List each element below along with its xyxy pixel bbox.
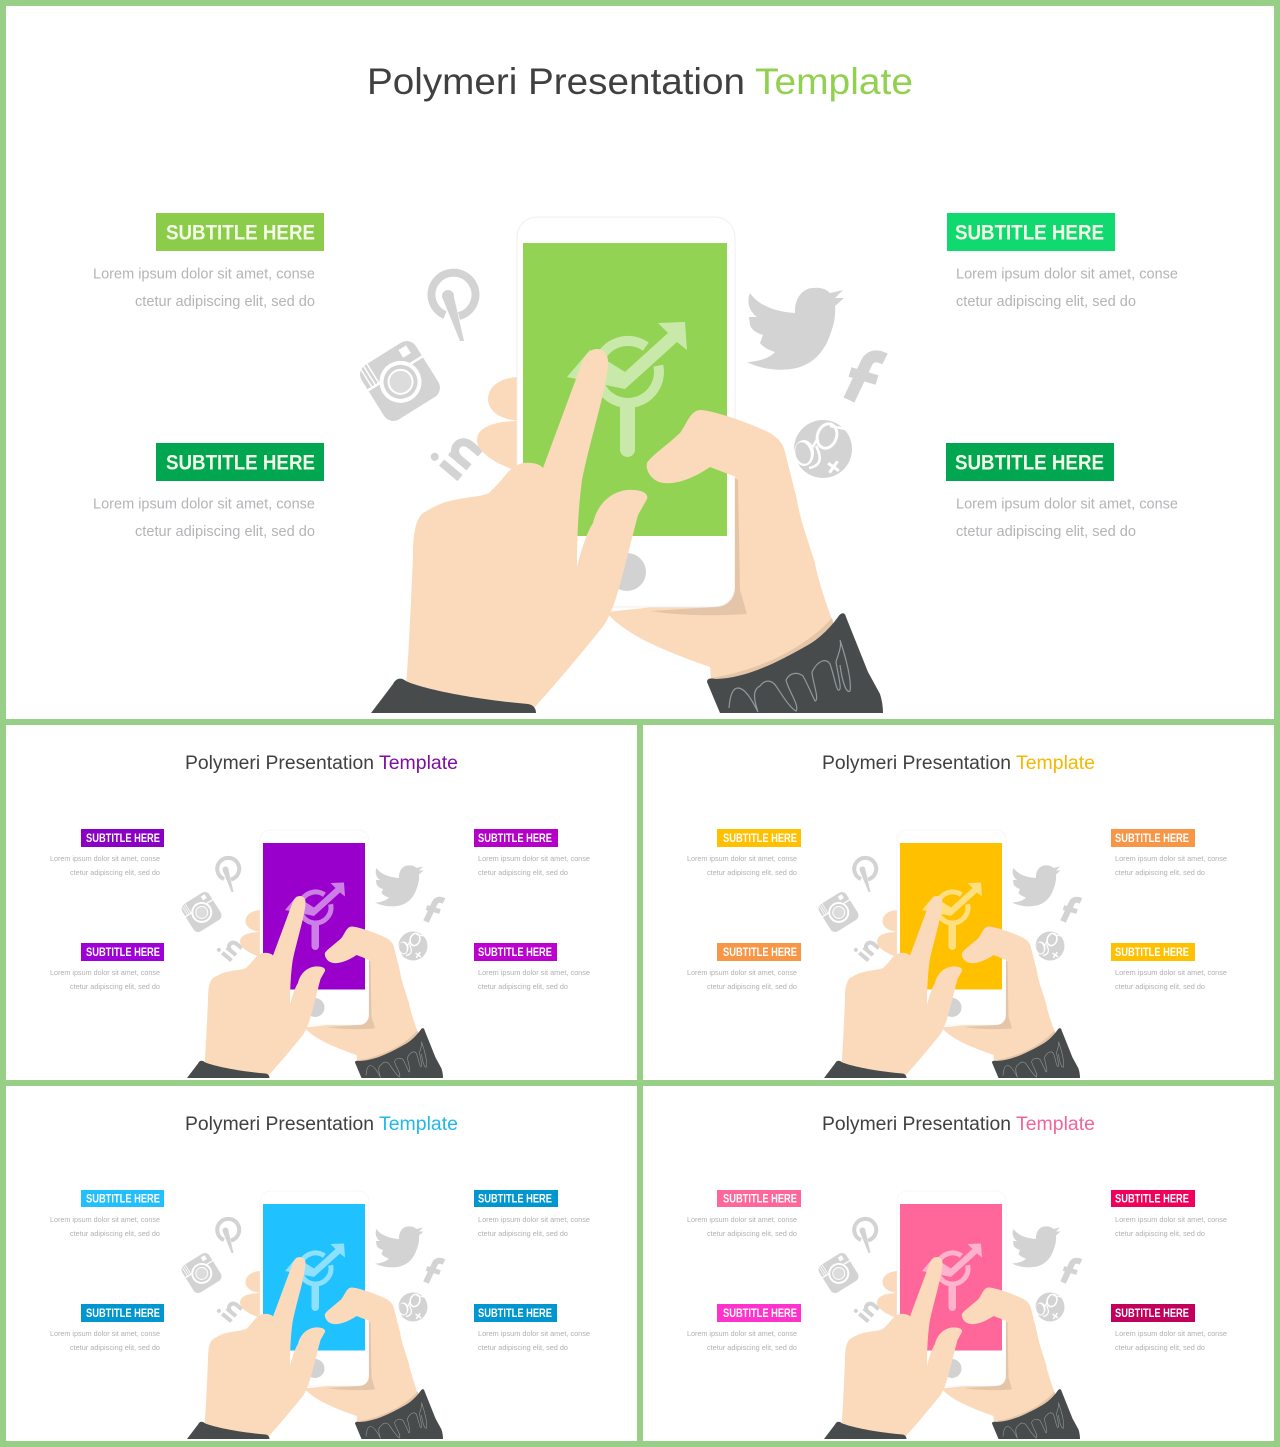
subtitle block: bottom left: SUBTITLE HERE [86, 947, 160, 959]
title: Polymeri Presentation [185, 1114, 374, 1135]
icon: facebook [849, 356, 885, 400]
icon: pinterest [431, 273, 475, 341]
subtitle block: bottom left: ctetur adipiscing elit, sed do [70, 982, 160, 991]
title: Polymeri Presentation [367, 61, 745, 102]
icon: magnifier and check arrow [567, 322, 687, 457]
right sleeve cuff [707, 613, 883, 713]
subtitle block: bottom right [1111, 943, 1227, 991]
illustration: pink phone [816, 1191, 1081, 1439]
subtitle block: bottom left [50, 1304, 164, 1352]
subtitle block: bottom right: ctetur adipiscing elit, sed do [956, 523, 1136, 540]
subtitle block: top right: ctetur adipiscing elit, sed do [1115, 1229, 1205, 1238]
hand: fingers behind phone [477, 377, 520, 472]
subtitle block: top left: ctetur adipiscing elit, sed do [70, 1229, 160, 1238]
title: Polymeri Presentation [185, 753, 374, 774]
icon: instagram [356, 337, 444, 425]
subtitle block: top left: ctetur adipiscing elit, sed do [707, 868, 797, 877]
subtitle block: bottom left: ctetur adipiscing elit, sed do [707, 1343, 797, 1352]
title [367, 61, 913, 102]
subtitle block: top right [474, 829, 590, 877]
subtitle block: bottom right: SUBTITLE HERE [478, 947, 552, 959]
title [185, 753, 458, 774]
subtitle block: top right [1111, 1190, 1227, 1238]
title [822, 753, 1095, 774]
subtitle block: top left: SUBTITLE HERE [166, 222, 315, 244]
subtitle block: bottom right: SUBTITLE HERE [1115, 1308, 1189, 1320]
subtitle block: bottom right: Lorem ipsum dolor sit amet, conse [956, 496, 1178, 512]
phone screen [523, 243, 727, 536]
subtitle block: bottom right: Lorem ipsum dolor sit amet, conse [1115, 968, 1227, 977]
illustration: yellow phone [816, 830, 1081, 1078]
subtitle block: bottom right [1111, 1304, 1227, 1352]
left sleeve cuff [371, 679, 536, 713]
subtitle block: top left: SUBTITLE HERE [723, 1194, 797, 1206]
subtitle block: bottom left [687, 1304, 801, 1352]
title: Template [1016, 753, 1095, 774]
subtitle block: bottom left: ctetur adipiscing elit, sed do [707, 982, 797, 991]
subtitle block: top right: Lorem ipsum dolor sit amet, conse [956, 266, 1178, 282]
left hand with pointing index finger [406, 349, 647, 708]
panel: main green slide [6, 6, 1274, 719]
subtitle block: bottom right: ctetur adipiscing elit, sed do [478, 982, 568, 991]
title: Polymeri Presentation [822, 1114, 1011, 1135]
subtitle block: bottom right: Lorem ipsum dolor sit amet, conse [478, 1329, 590, 1338]
phone body [517, 217, 735, 607]
icon: google plus [793, 419, 852, 478]
subtitle block: top left: SUBTITLE HERE [723, 833, 797, 845]
subtitle block: top left: Lorem ipsum dolor sit amet, conse [93, 266, 315, 282]
subtitle block: bottom left: Lorem ipsum dolor sit amet, conse [50, 1329, 160, 1338]
subtitle block: bottom left: Lorem ipsum dolor sit amet, conse [50, 968, 160, 977]
subtitle block: top right: SUBTITLE HERE [955, 222, 1104, 244]
subtitle block: top right [947, 213, 1178, 310]
subtitle block: bottom left: ctetur adipiscing elit, sed do [135, 523, 315, 540]
title: Template [379, 1114, 458, 1135]
subtitle block: top left: Lorem ipsum dolor sit amet, conse [687, 1215, 797, 1224]
subtitle block: top right: Lorem ipsum dolor sit amet, conse [478, 854, 590, 863]
subtitle block: bottom left: ctetur adipiscing elit, sed do [70, 1343, 160, 1352]
subtitle block: bottom right: ctetur adipiscing elit, sed do [478, 1343, 568, 1352]
subtitle block: bottom right: SUBTITLE HERE [955, 452, 1104, 474]
subtitle block: top right: ctetur adipiscing elit, sed do [956, 293, 1136, 310]
subtitle block: top left: Lorem ipsum dolor sit amet, conse [50, 854, 160, 863]
subtitle block: top right: SUBTITLE HERE [478, 1194, 552, 1206]
subtitle block: bottom right [474, 1304, 590, 1352]
subtitle block: top right: ctetur adipiscing elit, sed do [478, 868, 568, 877]
subtitle block: top left: ctetur adipiscing elit, sed do [707, 1229, 797, 1238]
subtitle block: bottom right: ctetur adipiscing elit, sed do [1115, 982, 1205, 991]
subtitle block: bottom right: Lorem ipsum dolor sit amet, conse [478, 968, 590, 977]
icon: twitter [747, 288, 844, 370]
subtitle block: top right: ctetur adipiscing elit, sed do [478, 1229, 568, 1238]
subtitle block: bottom left: Lorem ipsum dolor sit amet, conse [687, 1329, 797, 1338]
illustration: hands holding phone with social icons [356, 217, 885, 713]
subtitle block: bottom left: SUBTITLE HERE [723, 947, 797, 959]
subtitle block: top right: Lorem ipsum dolor sit amet, conse [478, 1215, 590, 1224]
title: Polymeri Presentation [822, 753, 1011, 774]
illustration: blue phone [179, 1191, 444, 1439]
hand: right palm behind phone [606, 447, 840, 695]
subtitle block: top right [1111, 829, 1227, 877]
subtitle block: bottom left: SUBTITLE HERE [166, 452, 315, 474]
title: Template [379, 753, 458, 774]
subtitle block: top right: SUBTITLE HERE [1115, 833, 1189, 845]
subtitle block: bottom left: SUBTITLE HERE [723, 1308, 797, 1320]
subtitle block: top right [474, 1190, 590, 1238]
subtitle block: bottom right [474, 943, 590, 991]
subtitle block: bottom right: Lorem ipsum dolor sit amet, conse [1115, 1329, 1227, 1338]
subtitle block: top right: SUBTITLE HERE [1115, 1194, 1189, 1206]
subtitle block: bottom left: Lorem ipsum dolor sit amet, conse [687, 968, 797, 977]
subtitle block: bottom right: SUBTITLE HERE [1115, 947, 1189, 959]
subtitle block: bottom left: Lorem ipsum dolor sit amet, conse [93, 496, 315, 512]
subtitle block: bottom right: SUBTITLE HERE [478, 1308, 552, 1320]
subtitle block: bottom left [687, 943, 801, 991]
panel: yellow slide [643, 725, 1274, 1080]
subtitle block: top right: SUBTITLE HERE [478, 833, 552, 845]
subtitle block: top left: Lorem ipsum dolor sit amet, conse [687, 854, 797, 863]
subtitle block: top right: Lorem ipsum dolor sit amet, conse [1115, 1215, 1227, 1224]
title [185, 1114, 458, 1135]
subtitle block: top left [50, 829, 164, 877]
subtitle block: bottom right [946, 443, 1178, 540]
subtitle block: bottom left: SUBTITLE HERE [86, 1308, 160, 1320]
subtitle block: top left [93, 213, 324, 310]
illustration: purple phone [179, 830, 444, 1078]
title [822, 1114, 1095, 1135]
subtitle block: top left [50, 1190, 164, 1238]
phone home button [608, 553, 646, 591]
subtitle block: bottom left [50, 943, 164, 991]
subtitle block: top right: ctetur adipiscing elit, sed do [1115, 868, 1205, 877]
subtitle block: bottom right: ctetur adipiscing elit, sed do [1115, 1343, 1205, 1352]
subtitle block: top left [687, 829, 801, 877]
subtitle block: bottom left [93, 443, 324, 540]
right thumb over phone [647, 410, 797, 530]
subtitle block: top left: ctetur adipiscing elit, sed do [70, 868, 160, 877]
panel: pink slide [643, 1086, 1274, 1441]
subtitle block: top left: Lorem ipsum dolor sit amet, conse [50, 1215, 160, 1224]
phone shadow [650, 478, 747, 615]
subtitle block: top left: ctetur adipiscing elit, sed do [135, 293, 315, 310]
panel: purple slide [6, 725, 637, 1080]
panel: blue slide [6, 1086, 637, 1441]
subtitle block: top right: Lorem ipsum dolor sit amet, conse [1115, 854, 1227, 863]
right wrist shadow [712, 618, 834, 684]
subtitle block: top left: SUBTITLE HERE [86, 1194, 160, 1206]
subtitle block: top left [687, 1190, 801, 1238]
subtitle block: top left: SUBTITLE HERE [86, 833, 160, 845]
title: Template [755, 61, 913, 102]
icon: linkedin [429, 430, 481, 481]
title: Template [1016, 1114, 1095, 1135]
